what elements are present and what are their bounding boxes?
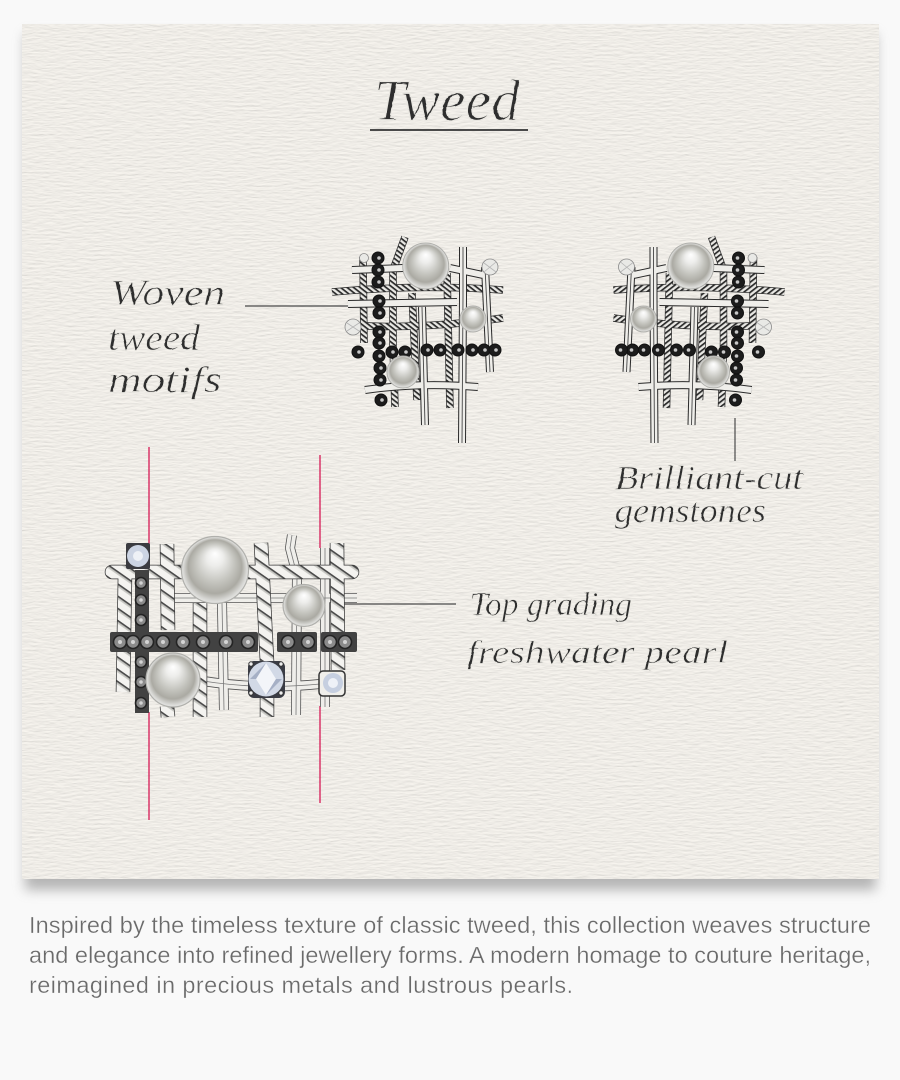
ring pearls: [146, 536, 325, 707]
note: woven tweed motifs: tweed: [108, 318, 201, 359]
paper sheet: [22, 24, 879, 879]
description text: and elegance into refined jewellery forms. A modern homage to couture heritage,: [29, 942, 871, 968]
paper shadow: [25, 34, 876, 890]
panel: paper sketch: [22, 24, 879, 879]
leader: freshwater pearl: [332, 603, 456, 605]
gem highlights: [357, 256, 498, 402]
note: woven tweed motifs: motifs: [108, 360, 222, 401]
note: freshwater pearl: [467, 587, 728, 671]
clear diamonds: [345, 254, 498, 335]
twisted rope strands: [112, 543, 352, 717]
leader: woven tweed motifs: [245, 305, 348, 307]
note: freshwater pearl: Top grading: [470, 587, 632, 623]
woven strands: [332, 237, 503, 443]
ring: [110, 535, 357, 717]
pave gem centres: [118, 581, 347, 705]
note: woven tweed motifs: [108, 273, 225, 401]
pave gems: [114, 578, 352, 708]
pearls: [387, 243, 486, 388]
note: brilliant-cut gemstones: Brilliant-cut: [615, 460, 805, 497]
title text: Tweed: [374, 68, 521, 133]
note: brilliant-cut gemstones: gemstones: [615, 493, 766, 530]
note: freshwater pearl: freshwater pearl: [467, 635, 728, 671]
note: woven tweed motifs: Woven: [110, 273, 225, 314]
description text: [29, 912, 871, 998]
black gemstones: [352, 252, 501, 406]
earring left: [332, 237, 503, 443]
earring right: [614, 237, 784, 443]
note: brilliant-cut gemstones: [615, 460, 805, 530]
red guide lines: [149, 447, 320, 820]
blue-white diamonds: [126, 543, 345, 698]
title underline: [370, 129, 528, 131]
plain strands: [170, 535, 357, 715]
pave gem bars: [110, 570, 357, 713]
description text: reimagined in precious metals and lustrous pearls.: [29, 972, 573, 998]
leader: brilliant-cut gemstones: [734, 418, 736, 461]
description text: Inspired by the timeless texture of classic tweed, this collection weaves structure: [29, 912, 871, 938]
